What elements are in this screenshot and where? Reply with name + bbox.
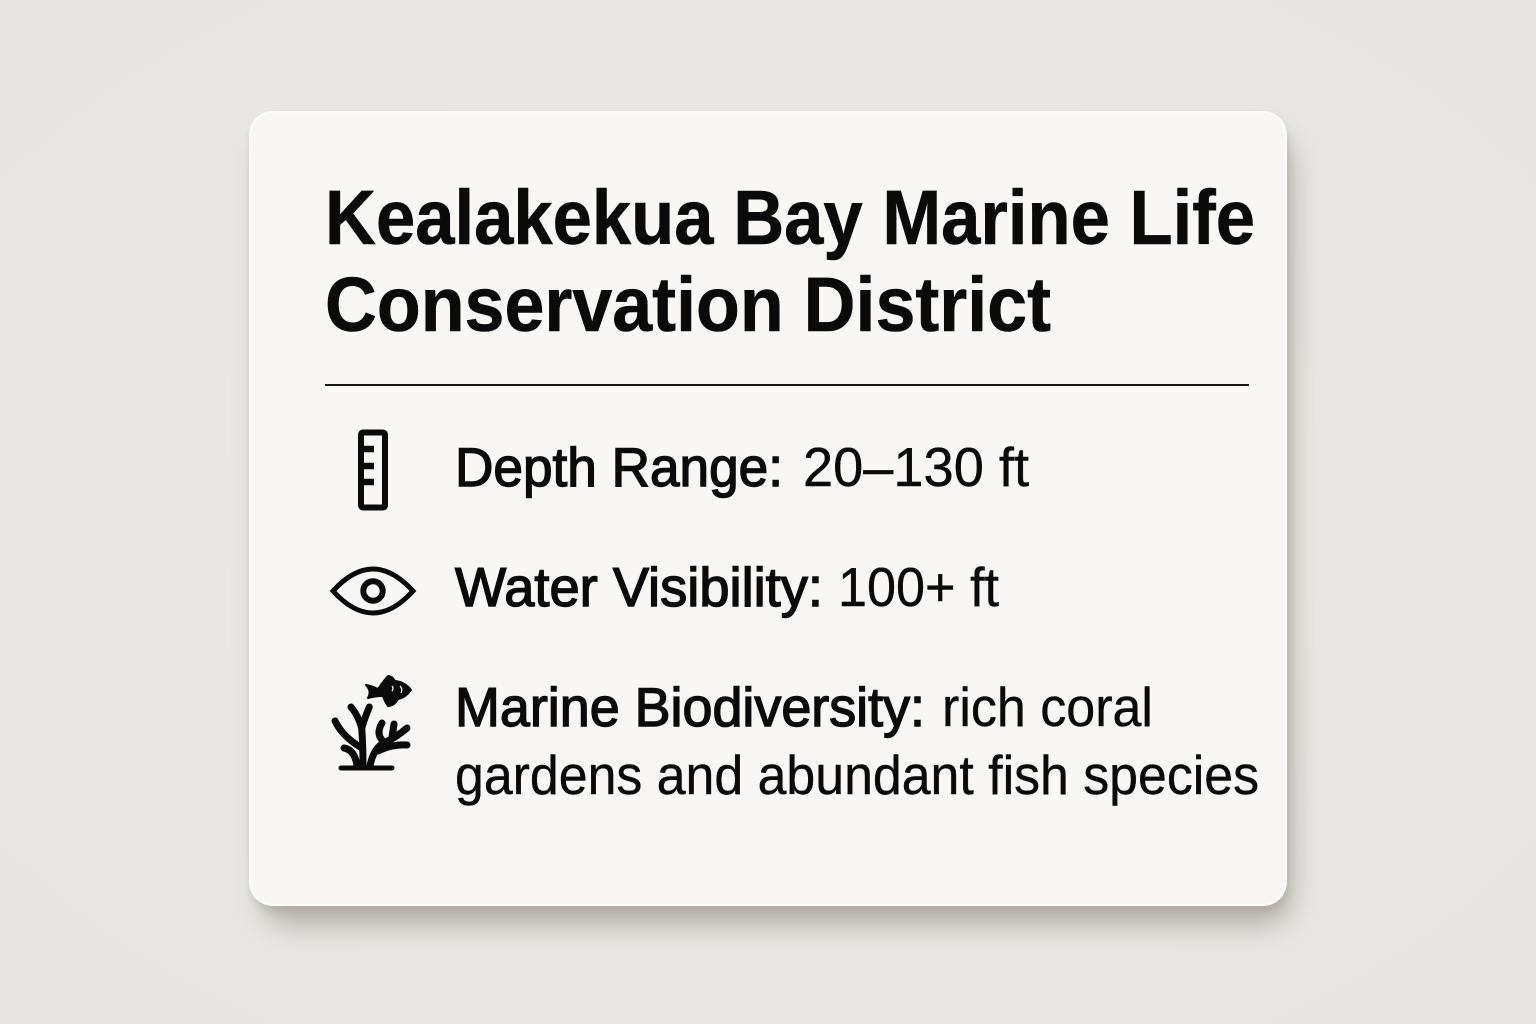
depth range text: Depth Range: [455, 436, 783, 498]
icon: eye [333, 569, 413, 613]
icon: coral and fish [335, 676, 411, 768]
water visibility text [455, 556, 999, 618]
icon: depth ruler [360, 432, 385, 508]
title: Kealakekua Bay Marine Life [325, 175, 1255, 261]
depth range text [455, 436, 1029, 498]
card shadow [252, 116, 1292, 925]
marine biodiversity text [455, 676, 1259, 806]
title: Conservation District [325, 262, 1051, 348]
water visibility text: Water Visibility: [455, 556, 823, 618]
marine biodiversity text: Marine Biodiversity: [455, 676, 925, 738]
water visibility text: 100+ ft [838, 556, 999, 618]
marine biodiversity text: gardens and abundant fish species [455, 744, 1259, 806]
depth range text: 20–130 ft [803, 436, 1029, 498]
icon: fish [366, 676, 411, 706]
marine biodiversity text: rich coral [942, 676, 1153, 738]
title [325, 175, 1255, 348]
panel: info card [249, 111, 1287, 906]
icon: coral [335, 707, 407, 768]
